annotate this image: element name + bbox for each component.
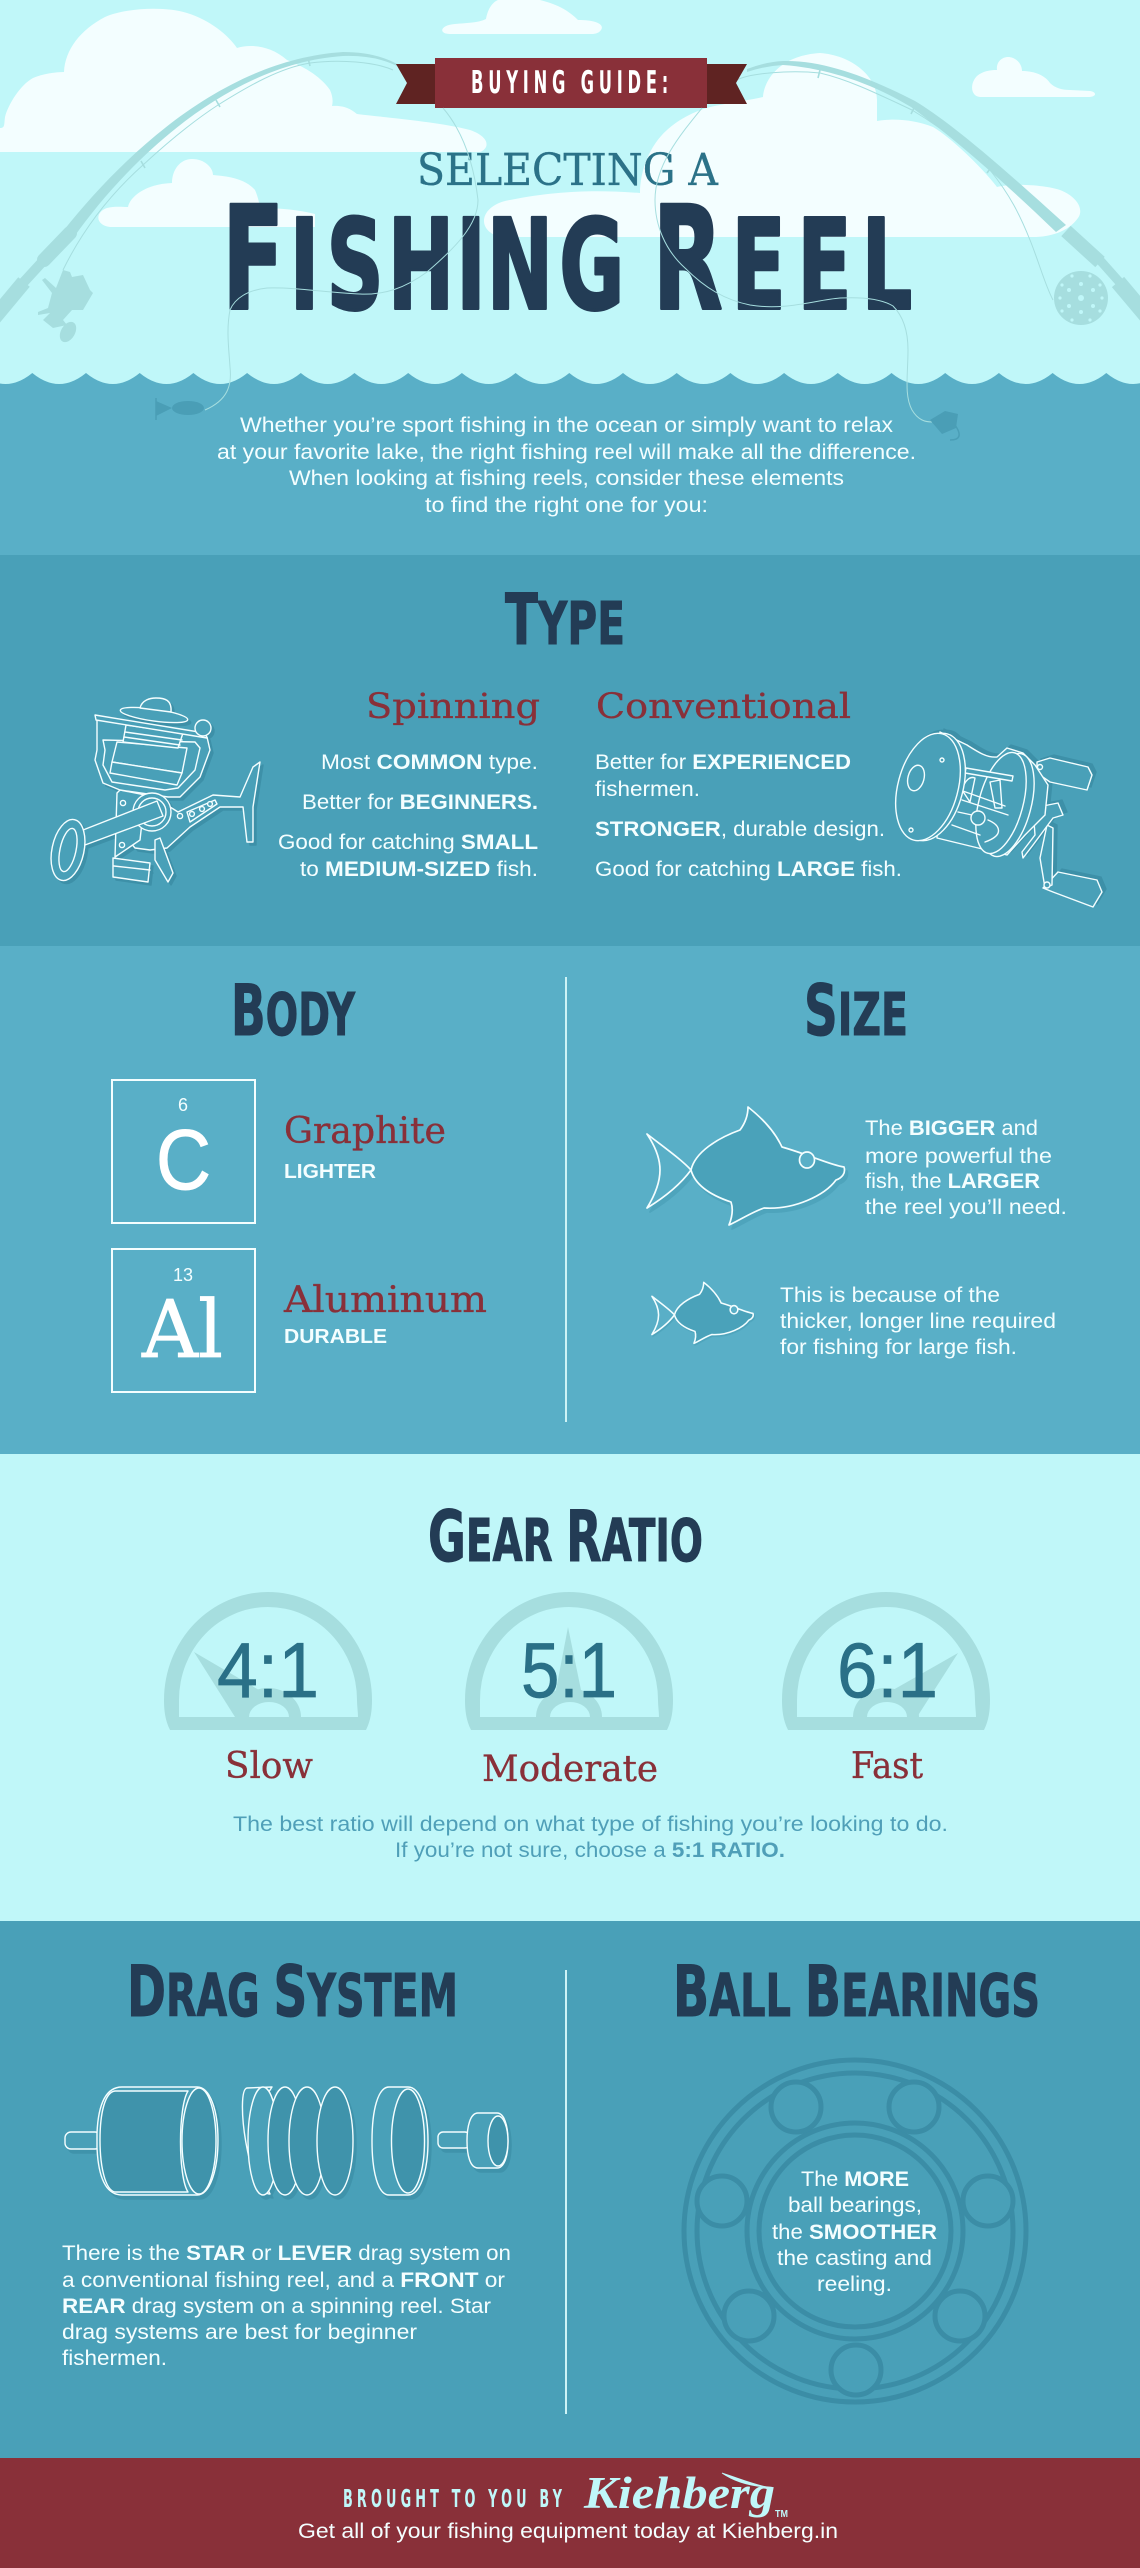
water bbox=[0, 373, 1140, 556]
big fish text: The BIGGER and bbox=[865, 1117, 1038, 1140]
logo: kiehberg: Kiehberg bbox=[583, 2468, 775, 2518]
conventional text: fishermen. bbox=[595, 778, 700, 801]
spinning text: to MEDIUM-SIZED fish. bbox=[300, 858, 538, 881]
heading: drag system: DRAG SYSTEM bbox=[127, 1951, 458, 2033]
ball bearings text: ball bearings, bbox=[788, 2194, 922, 2217]
heading: type: TYPE bbox=[505, 579, 625, 661]
gauge: 6:1 fast: 6:1 bbox=[837, 1626, 938, 1714]
footer text: Get all of your fishing equipment today at Kiehberg.in bbox=[298, 2520, 838, 2543]
icon: fishing lure left bbox=[156, 398, 204, 420]
gauge: 6:1 fast: Fast bbox=[851, 1746, 923, 1787]
subheading: conventional: Conventional bbox=[596, 687, 851, 727]
panel: gear ratio bbox=[0, 1454, 1140, 1921]
heading: ball bearings: BALL BEARINGS bbox=[673, 1951, 1040, 2033]
drag text: There is the STAR or LEVER drag system on bbox=[62, 2242, 511, 2265]
panel: body and size bbox=[0, 946, 1140, 1454]
ball bearings text: The MORE bbox=[801, 2168, 909, 2191]
banner: buying guide bbox=[396, 58, 747, 108]
ball bearings text: reeling. bbox=[817, 2273, 892, 2296]
element: aluminum bbox=[112, 1249, 255, 1392]
title: fishing reel: EEL bbox=[731, 193, 912, 338]
title: selecting a: SELECTING A bbox=[417, 145, 719, 196]
ball bearings text: the casting and bbox=[777, 2247, 932, 2270]
icon: small fish bbox=[652, 1282, 753, 1343]
big fish text: more powerful the bbox=[865, 1145, 1052, 1168]
gear ratio note: If you’re not sure, choose a 5:1 RATIO. bbox=[395, 1839, 785, 1862]
icon: ball bearing bbox=[684, 2060, 1026, 2402]
big fish text: fish, the LARGER bbox=[865, 1170, 1040, 1193]
element: aluminum: 13 bbox=[173, 1265, 193, 1285]
logo: kiehberg: TM bbox=[775, 2509, 788, 2520]
gear ratio note bbox=[233, 1813, 948, 1862]
big fish text: the reel you’ll need. bbox=[865, 1196, 1067, 1219]
conventional text bbox=[595, 751, 902, 881]
heading: size: SIZE bbox=[804, 970, 908, 1052]
small fish text bbox=[780, 1284, 1056, 1359]
clouds bbox=[0, 0, 1095, 237]
gauge: 4:1 slow bbox=[164, 1592, 372, 1787]
heading: body: BODY bbox=[231, 970, 356, 1052]
drag text: drag systems are best for beginner bbox=[62, 2321, 417, 2344]
gauge: 4:1 slow: Slow bbox=[225, 1746, 313, 1787]
fishing line: left bbox=[205, 108, 478, 410]
gauge: 4:1 slow: 4:1 bbox=[217, 1626, 319, 1714]
intro text: at your favorite lake, the right fishing reel will make all the difference. bbox=[217, 441, 916, 464]
element: carbon: 6 bbox=[178, 1095, 188, 1115]
label: graphite: LIGHTER bbox=[284, 1161, 377, 1183]
conventional text: Better for EXPERIENCED bbox=[595, 751, 851, 774]
title: fishing reel: F bbox=[222, 177, 284, 343]
spinning text bbox=[278, 751, 538, 881]
ball bearings text: the SMOOTHER bbox=[772, 2221, 937, 2244]
icon: drag system parts bbox=[65, 2087, 508, 2195]
intro text: Whether you’re sport fishing in the ocean or simply want to relax bbox=[240, 414, 894, 437]
drag text: a conventional fishing reel, and a FRONT or bbox=[62, 2269, 505, 2292]
label: graphite: Graphite bbox=[284, 1111, 446, 1152]
panel: drag system and ball bearings bbox=[0, 1921, 1140, 2459]
fishing line: right bbox=[655, 108, 932, 422]
icon: silhouette fly reel bbox=[1054, 271, 1108, 325]
title: fishing reel: ISHING bbox=[290, 193, 624, 338]
spinning text: Good for catching SMALL bbox=[278, 831, 538, 854]
banner: buying guide: BUYING GUIDE: bbox=[471, 65, 673, 101]
heading: gear ratio: GEAR RATIO bbox=[428, 1496, 703, 1578]
drag text: fishermen. bbox=[62, 2347, 167, 2370]
panel: type bbox=[0, 555, 1140, 946]
gear ratio note: The best ratio will depend on what type of fishing you’re looking to do. bbox=[233, 1813, 948, 1836]
element: carbon bbox=[112, 1080, 255, 1223]
intro text bbox=[217, 414, 916, 517]
brought to you by: BROUGHT TO YOU BY bbox=[343, 2484, 566, 2513]
small fish text: for fishing for large fish. bbox=[780, 1336, 1017, 1359]
icon: fishing lure right bbox=[930, 411, 959, 440]
icon: silhouette spinning reel bbox=[38, 270, 93, 345]
subheading: spinning: Spinning bbox=[366, 687, 540, 727]
intro text: to find the right one for you: bbox=[425, 494, 708, 517]
element: carbon: C bbox=[156, 1113, 211, 1208]
label: graphite bbox=[284, 1111, 446, 1183]
gauge: 6:1 fast bbox=[782, 1592, 990, 1787]
panel: hero header bbox=[0, 0, 1140, 556]
fishing rod: left bbox=[0, 52, 397, 318]
icon: conventional reel bbox=[885, 726, 1102, 907]
spinning text: Most COMMON type. bbox=[321, 751, 538, 774]
icon: spinning reel bbox=[46, 698, 260, 884]
title: fishing reel bbox=[222, 177, 912, 343]
gauge: 5:1 moderate: Moderate bbox=[482, 1749, 658, 1790]
conventional text: Good for catching LARGE fish. bbox=[595, 858, 902, 881]
gauge: 5:1 moderate bbox=[465, 1592, 673, 1790]
drag text bbox=[62, 2242, 511, 2370]
ball bearings text bbox=[772, 2168, 937, 2296]
title: fishing reel: R bbox=[653, 177, 723, 343]
element: aluminum: Al bbox=[141, 1283, 223, 1376]
label: aluminum: DURABLE bbox=[284, 1326, 387, 1348]
gauge: 5:1 moderate: 5:1 bbox=[521, 1626, 617, 1714]
small fish text: This is because of the bbox=[780, 1284, 1000, 1307]
label: aluminum bbox=[283, 1280, 487, 1348]
big fish text bbox=[865, 1117, 1067, 1219]
label: aluminum: Aluminum bbox=[283, 1280, 487, 1321]
intro text: When looking at fishing reels, consider these elements bbox=[289, 467, 844, 490]
small fish text: thicker, longer line required bbox=[780, 1310, 1056, 1333]
spinning text: Better for BEGINNERS. bbox=[302, 791, 538, 814]
fishing rod: right bbox=[737, 61, 1140, 320]
icon: big fish bbox=[647, 1107, 845, 1225]
conventional text: STRONGER , durable design. bbox=[595, 818, 885, 841]
drag text: REAR drag system on a spinning reel. Star bbox=[62, 2295, 491, 2318]
panel: footer bbox=[0, 2458, 1140, 2568]
